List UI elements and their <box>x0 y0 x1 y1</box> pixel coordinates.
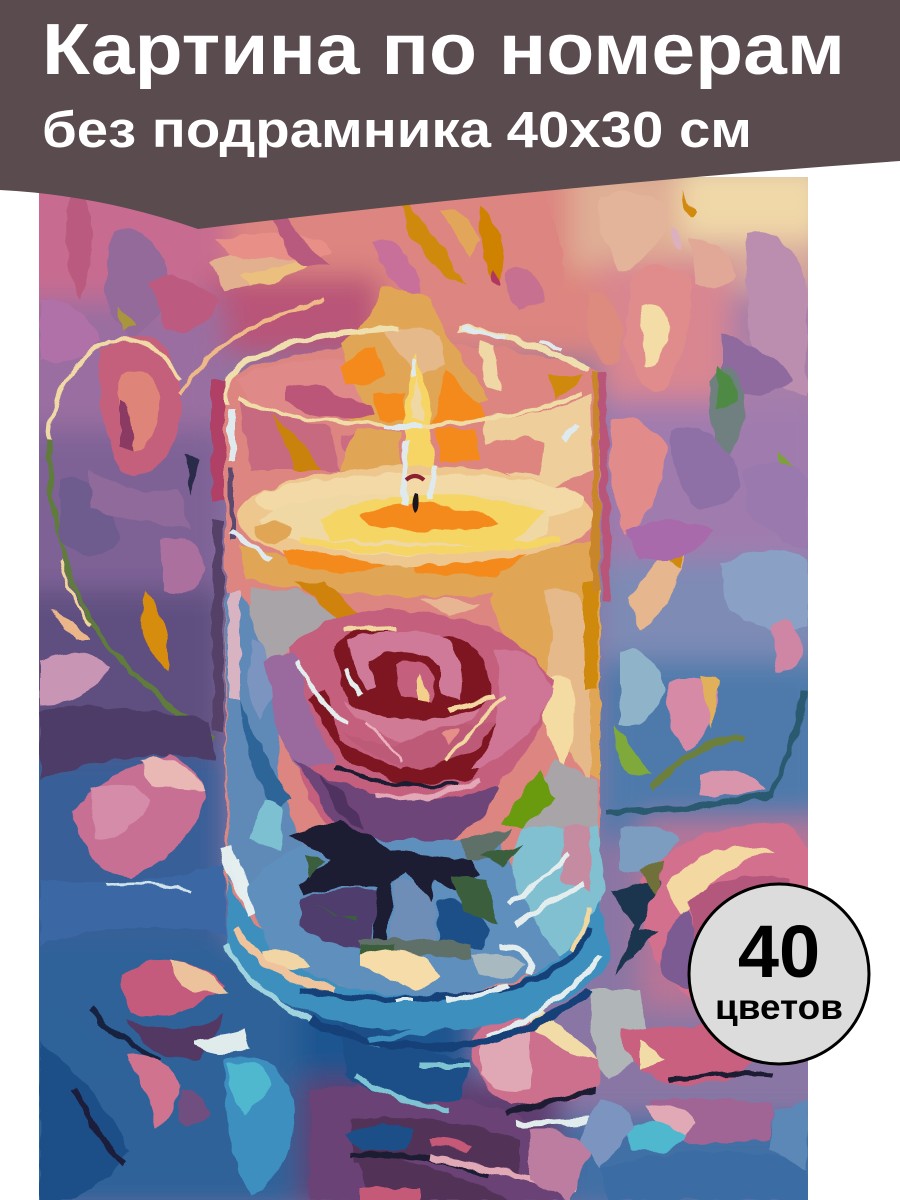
title line 2: без подрамника 40х30 см <box>42 101 752 158</box>
badge: 40 colours <box>689 884 869 1064</box>
background colour fields <box>0 160 830 1200</box>
painting: candle in glass with roses <box>0 160 830 1200</box>
glass highlights <box>225 328 590 405</box>
badge number: 40 <box>738 910 820 993</box>
badge label: цветов <box>715 988 843 1027</box>
right rose <box>640 824 810 1010</box>
background top strokes <box>67 190 91 300</box>
right side <box>610 418 668 535</box>
glass right side <box>520 760 598 830</box>
painted strokes <box>40 190 810 1200</box>
flower stem and sepals <box>288 820 480 940</box>
left bud and stem <box>99 336 181 476</box>
glass base <box>225 880 610 1030</box>
left petal <box>72 755 205 878</box>
title line 1: Картина по номерам <box>42 10 845 90</box>
flame <box>403 354 435 468</box>
lower wax salmon <box>240 590 590 700</box>
upper glass <box>342 287 490 430</box>
glass left side <box>225 590 305 900</box>
big rose <box>270 609 553 855</box>
flame wick <box>406 476 424 513</box>
glass body base <box>225 344 601 997</box>
header banner <box>0 0 900 229</box>
floor strokes <box>40 865 225 945</box>
wax <box>237 466 593 570</box>
title <box>42 10 845 158</box>
